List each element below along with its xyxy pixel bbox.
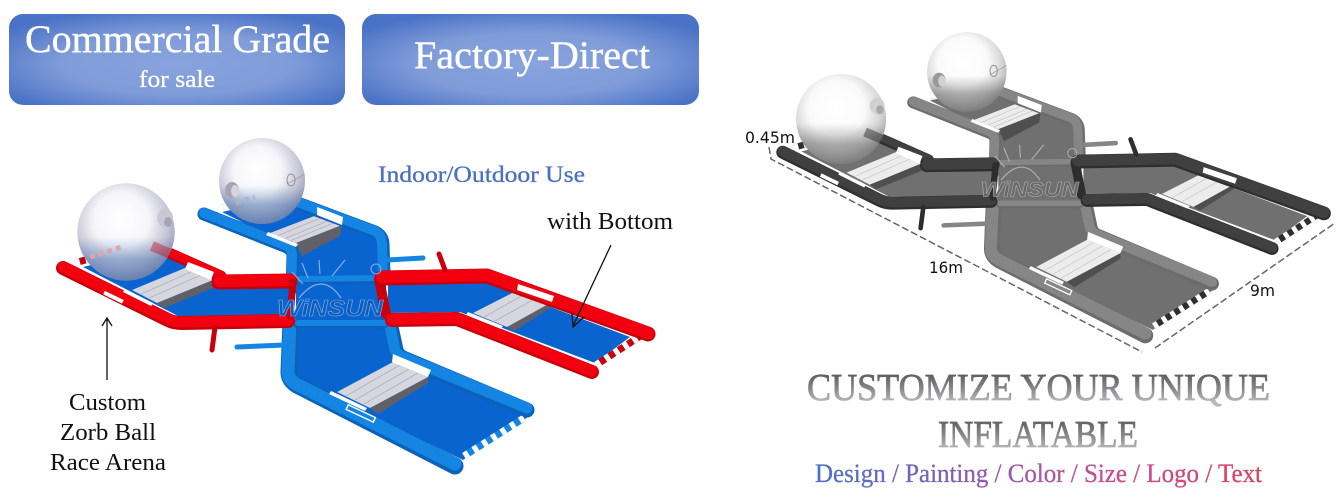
lane end strips on mid-grey lanes — [931, 86, 1209, 326]
ball: front zorb ball — [77, 183, 175, 281]
label: Custom Zorb Ball Race Arena: Custom — [69, 390, 146, 416]
ball: rear zorb ball — [219, 138, 305, 224]
button: Factory-Direct — [362, 14, 699, 105]
dimension label: 9m: 9m — [1250, 281, 1275, 300]
button: Commercial Grade for sale — [9, 14, 345, 105]
button: Commercial Grade for sale: Commercial Grade — [25, 18, 330, 61]
logo: Winsun grey: WiNSUN — [981, 178, 1079, 202]
ball: front grey zorb ball — [796, 74, 886, 164]
subheading: customization options: Design / Painting / Color / Size / Logo / Text — [815, 459, 1263, 488]
lane end checker strips on blue lanes — [223, 196, 524, 456]
button: Commercial Grade for sale: for sale — [139, 67, 215, 93]
dark lanes — [783, 133, 1324, 248]
dimension lines — [769, 147, 1335, 352]
central panel with bands — [296, 278, 386, 324]
greyscale arena illustration — [783, 32, 1324, 335]
logo: Winsun — [277, 260, 383, 321]
label: Custom Zorb Ball Race Arena: Zorb Ball — [60, 420, 156, 446]
ball: rear grey zorb ball — [927, 32, 1007, 112]
label: Indoor/Outdoor Use: Indoor/Outdoor Use — [378, 162, 585, 187]
label: Custom Zorb Ball Race Arena: Race Arena — [50, 450, 166, 476]
logo: Winsun grey — [981, 145, 1079, 202]
label: Custom Zorb Ball Race Arena — [50, 390, 166, 476]
logo: Winsun: WiNSUN — [277, 295, 383, 321]
red lanes — [63, 247, 648, 372]
colour arena illustration — [63, 138, 648, 466]
mid-grey tubes — [913, 87, 1212, 335]
label: with Bottom: with Bottom — [547, 209, 673, 235]
button: Factory-Direct: Factory-Direct — [414, 34, 650, 77]
grey central panel with bands — [998, 162, 1082, 204]
heading: Customize your unique inflatable: CUSTOMIZE YOUR UNIQUE — [807, 367, 1270, 409]
blue tubes — [204, 197, 527, 466]
dimension label: 16m: 16m — [929, 258, 963, 277]
blue lane floors and slides — [222, 198, 528, 460]
grey lane floors and slides — [930, 88, 1213, 330]
arrow: to arena — [102, 318, 112, 380]
dimension label: 0.45m: 0.45m — [745, 128, 795, 147]
heading: Customize your unique inflatable: INFLATABLE — [938, 414, 1138, 456]
arrow: to bottom — [572, 245, 611, 327]
heading: Customize your unique inflatable — [807, 367, 1270, 456]
